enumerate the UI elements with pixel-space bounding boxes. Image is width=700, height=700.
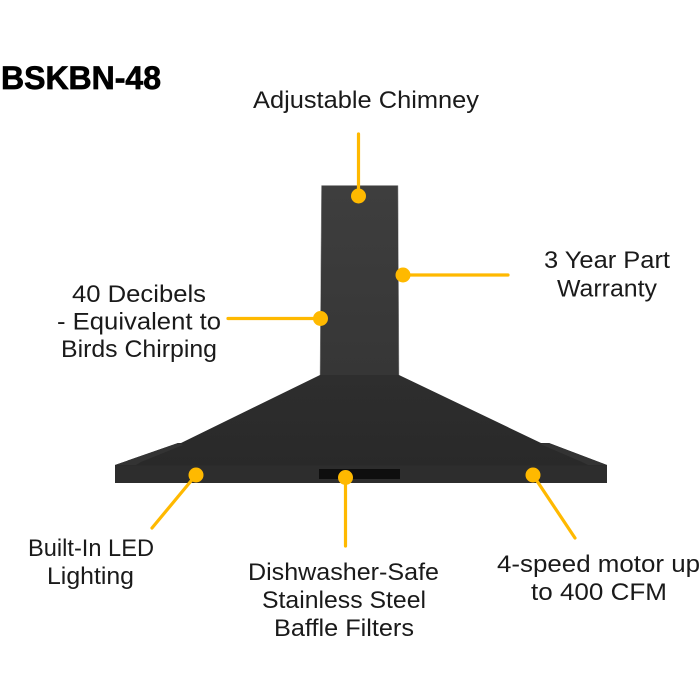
callout marker: motor bbox=[526, 468, 575, 538]
label: baffle filters: Stainless Steel bbox=[262, 587, 426, 614]
callout marker: LED lighting bbox=[152, 468, 204, 528]
hood chimney bbox=[320, 186, 399, 376]
callout marker: warranty bbox=[396, 268, 508, 282]
hood left wing edge bbox=[115, 443, 183, 465]
label: warranty bbox=[544, 247, 670, 302]
label: warranty: Warranty bbox=[557, 276, 658, 302]
label: decibels: - Equivalent to bbox=[57, 308, 221, 336]
label: LED lighting bbox=[28, 535, 154, 590]
label: motor: 4-speed motor up bbox=[497, 551, 700, 578]
label: motor bbox=[497, 551, 700, 606]
label: decibels: 40 Decibels bbox=[72, 281, 206, 308]
label: LED lighting: Built-In LED bbox=[28, 535, 154, 562]
callout marker: decibels bbox=[228, 311, 328, 326]
hood canopy bbox=[115, 375, 607, 483]
callout marker: baffle filters bbox=[338, 470, 353, 546]
hood front band bbox=[115, 466, 607, 483]
label: decibels bbox=[57, 281, 221, 363]
label: decibels: Birds Chirping bbox=[61, 336, 217, 363]
label: baffle filters: Dishwasher-Safe bbox=[248, 559, 439, 586]
label: warranty: 3 Year Part bbox=[544, 247, 670, 274]
label: adjustable chimney: Adjustable Chimney bbox=[253, 87, 480, 114]
range hood product bbox=[115, 186, 607, 483]
title: BSKBN-48 bbox=[1, 60, 161, 96]
label: baffle filters: Baffle Filters bbox=[274, 615, 414, 642]
label: baffle filters bbox=[248, 559, 439, 642]
baffle filter slot bbox=[319, 469, 400, 479]
callout marker: chimney bbox=[351, 134, 366, 204]
hood right wing edge bbox=[540, 443, 607, 465]
label: motor: to 400 CFM bbox=[531, 579, 667, 606]
label: LED lighting: Lighting bbox=[47, 563, 134, 590]
